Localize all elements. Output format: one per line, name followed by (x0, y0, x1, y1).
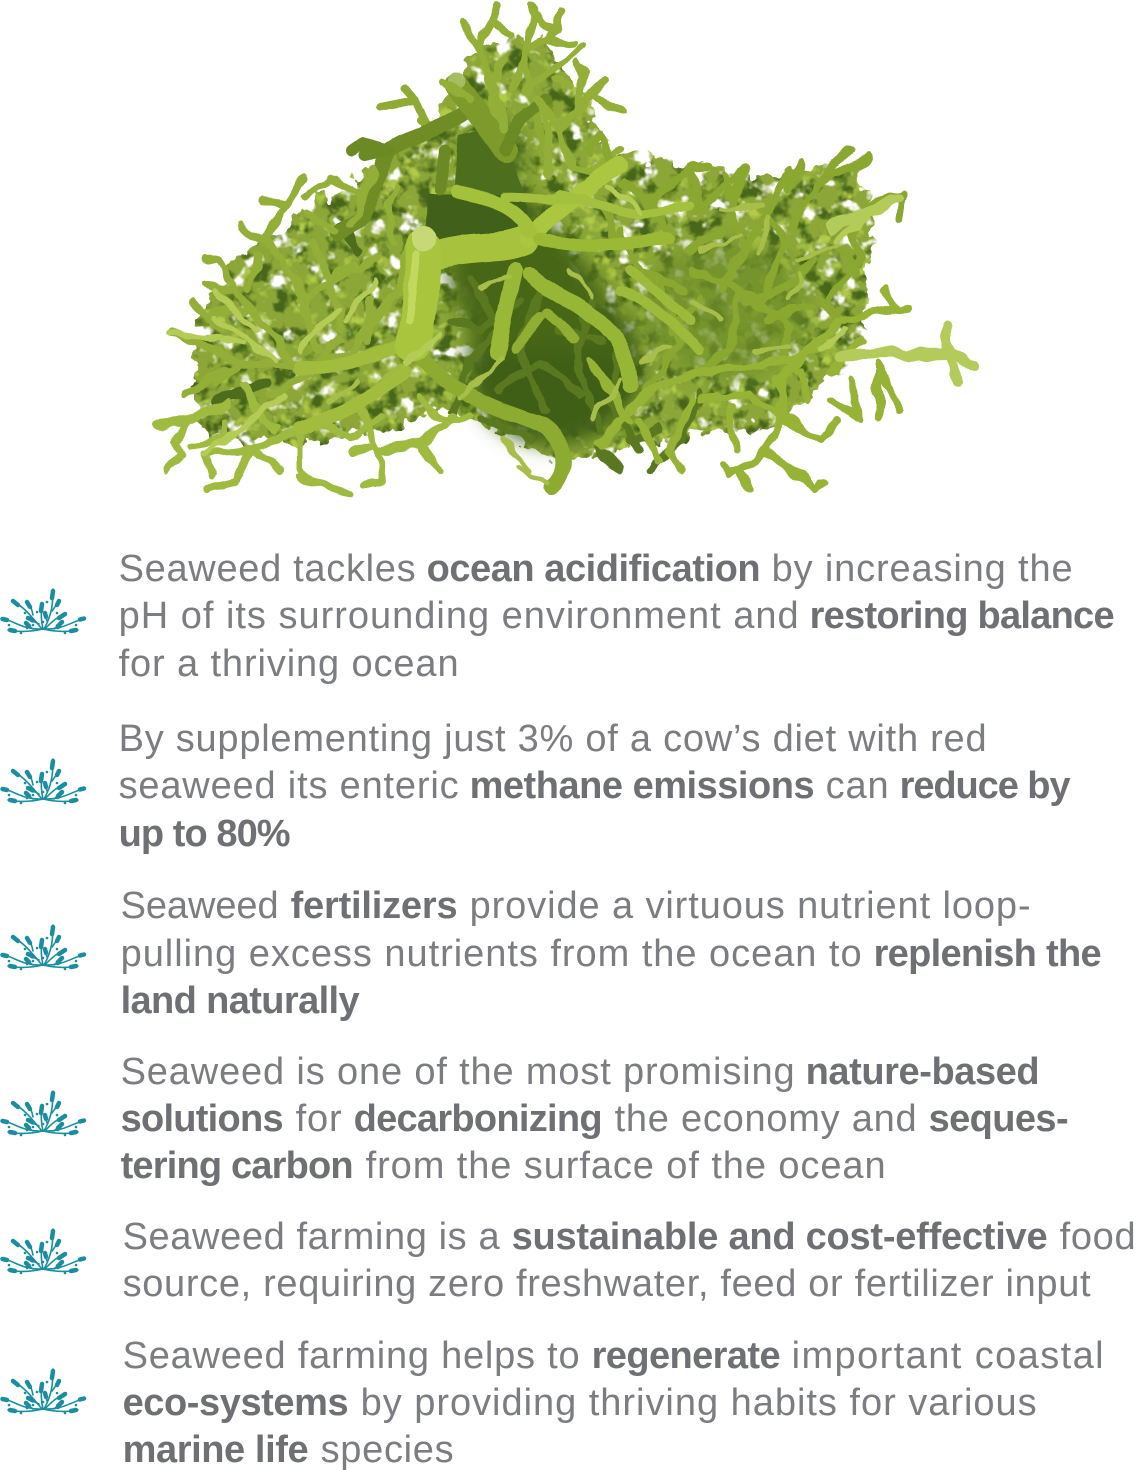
text block: sustainable food (123, 1216, 1136, 1305)
text block: decarbonizing: from the surface of the ocean (366, 1145, 886, 1187)
text block: methane emissions: reduce by (900, 765, 1071, 807)
text block: fertilizers: Seaweed (121, 885, 279, 927)
text block: decarbonizing: Seaweed is one of the most promising (121, 1051, 795, 1093)
bright main branch (300, 165, 700, 487)
text block: decarbonizing: decarbonizing (354, 1098, 603, 1140)
text block: regenerate ecosystems: important coastal (792, 1335, 1104, 1377)
text block: sustainable food: Seaweed farming is a (123, 1216, 500, 1258)
text block: ocean acidification: ocean acidification (427, 548, 761, 590)
icon: seaweed bullet 2 (2, 759, 84, 804)
text block: fertilizers: pulling excess nutrients from the ocean to (121, 933, 862, 975)
text block: ocean acidification (119, 548, 1115, 685)
text block: decarbonizing: for (296, 1098, 342, 1140)
text block: fertilizers: replenish the (874, 933, 1102, 975)
text block: ocean acidification: pH of its surrounding environment and (119, 595, 799, 637)
text block: regenerate ecosystems: eco-systems (123, 1382, 349, 1424)
dark inner branches (214, 225, 700, 470)
text block: methane emissions: By supplementing just 3% of a cow’s diet with red (119, 718, 987, 760)
text block: fertilizers: fertilizers (291, 885, 458, 927)
illustration: green seaweed (157, 5, 974, 493)
text block: regenerate ecosystems: marine life (123, 1429, 309, 1470)
text block: methane emissions: methane emissions (470, 765, 815, 807)
text block: decarbonizing (121, 1051, 1069, 1187)
text block: regenerate ecosystems (123, 1335, 1104, 1470)
bright branch tips and highlights (170, 185, 880, 485)
text block: sustainable food: source, requiring zero freshwater, feed or fertilizer input (123, 1263, 1091, 1305)
mid-green fine branches (157, 5, 974, 493)
text block: sustainable food: sustainable and cost-effective (512, 1216, 1048, 1258)
text block: decarbonizing: tering carbon (121, 1145, 354, 1187)
text block: methane emissions (119, 718, 1071, 855)
text block: decarbonizing: solutions (121, 1098, 284, 1140)
text block: fertilizers (121, 885, 1102, 1022)
dark upper stems (338, 80, 545, 233)
text block: sustainable food: food (1060, 1216, 1136, 1258)
text block: regenerate ecosystems: Seaweed farming helps to (123, 1335, 580, 1377)
icon: seaweed bullet 1 (2, 589, 84, 634)
text block: fertilizers: provide a virtuous nutrient loop- (470, 885, 1031, 927)
icon: seaweed bullet 4 (2, 1091, 84, 1136)
text block: ocean acidification: Seaweed tackles (119, 548, 416, 590)
text block: decarbonizing: the economy and (615, 1098, 917, 1140)
text block: regenerate ecosystems: regenerate (592, 1335, 781, 1377)
text block: decarbonizing: nature-based (806, 1051, 1040, 1093)
icon: seaweed bullet 6 (2, 1369, 84, 1414)
text block: ocean acidification: restoring balance (810, 595, 1115, 637)
text block: ocean acidification: by increasing the (772, 548, 1073, 590)
text block: methane emissions: up to 80% (119, 813, 291, 855)
text block: methane emissions: can (826, 765, 889, 807)
text block: regenerate ecosystems: by providing thriving habits for various (361, 1382, 1037, 1424)
text block: methane emissions: seaweed its enteric (119, 765, 459, 807)
text block: regenerate ecosystems: species (321, 1429, 454, 1470)
text block: decarbonizing: seques- (929, 1098, 1069, 1140)
icon: seaweed bullet 3 (2, 925, 84, 970)
icon: seaweed bullet 5 (2, 1229, 84, 1274)
text block: fertilizers: land naturally (121, 980, 360, 1022)
text block: ocean acidification: for a thriving ocean (119, 643, 459, 685)
